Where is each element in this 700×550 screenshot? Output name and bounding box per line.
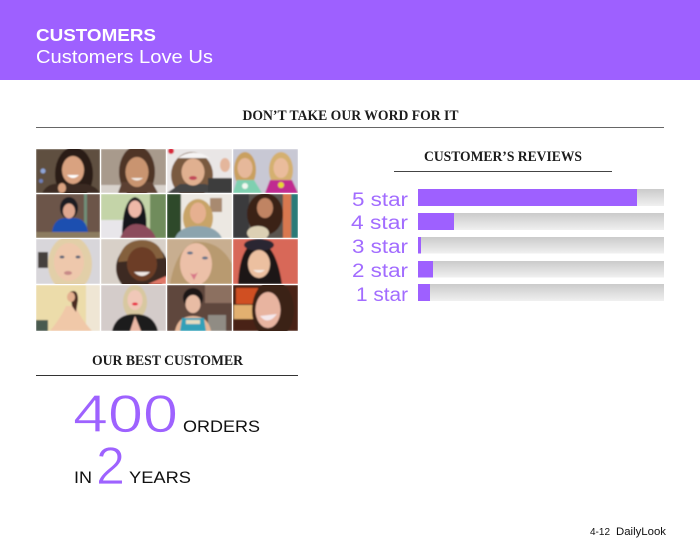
row: 1 star <box>356 284 664 306</box>
row: 4 star <box>351 213 664 234</box>
footer page label: DailyLook <box>616 526 667 538</box>
photo 10 <box>101 239 166 284</box>
photo 12 <box>233 239 298 284</box>
row: 4 star: 4 star <box>351 213 409 234</box>
row: 3 star <box>352 237 664 258</box>
heading: customer's reviews: CUSTOMER’S REVIEWS <box>424 149 582 165</box>
row: 5 star: 5 star <box>352 190 409 211</box>
photo 1 <box>36 149 100 193</box>
photo 9 <box>36 239 100 284</box>
header subtitle: Customers Love Us <box>36 46 213 67</box>
photo 15 <box>167 285 232 331</box>
footer page label <box>590 526 667 538</box>
photo 16 <box>233 285 298 331</box>
photo 11 <box>167 239 232 285</box>
photo 3 <box>167 149 232 193</box>
row: 2 star: 2 star <box>352 261 409 282</box>
photo 8 <box>233 193 298 240</box>
photo 7 <box>167 194 232 238</box>
number 400: 400 <box>73 385 178 444</box>
label in: IN <box>74 468 92 487</box>
photo grid of customers <box>36 146 298 340</box>
row: 3 star: 3 star <box>352 237 409 258</box>
photo 4 <box>233 149 298 193</box>
row: 2 star <box>352 261 664 282</box>
row: 5 star <box>352 189 664 211</box>
header title: CUSTOMERS <box>36 25 156 45</box>
header banner <box>0 0 700 80</box>
photo 13 <box>36 285 100 331</box>
photo 6 <box>101 194 166 238</box>
stat: 400 orders in 2 years <box>73 385 260 496</box>
label years: YEARS <box>129 468 191 487</box>
row: 1 star: 1 star <box>356 285 409 306</box>
footer page label: 4-12 <box>590 526 610 538</box>
heading: our best customer: OUR BEST CUSTOMER <box>92 353 243 369</box>
heading: don't take our word for it: DON’T TAKE OUR WORD FOR IT <box>242 108 459 124</box>
photo 5 <box>36 194 100 238</box>
label orders: ORDERS <box>183 417 260 436</box>
bar chart: star reviews <box>351 189 664 306</box>
photo 14 <box>101 285 166 331</box>
number 2: 2 <box>96 437 125 496</box>
photo 2 <box>101 149 166 193</box>
